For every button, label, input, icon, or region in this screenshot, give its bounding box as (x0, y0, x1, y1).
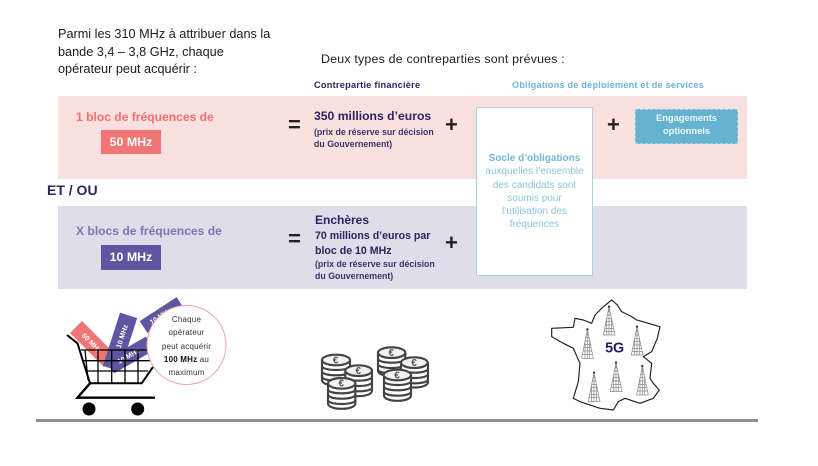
text: et / ou: ET / OU (47, 182, 98, 198)
tag: 10 MHz in cart (106, 337, 154, 373)
plus sign: second row: + (445, 230, 458, 255)
panel: base obligations: l’utilisation des (502, 206, 567, 217)
tag: 10 MHz (101, 245, 161, 270)
icon: euro coin stacks (322, 347, 428, 409)
tower tips (586, 305, 643, 374)
panel: base obligations: soumis pour (507, 193, 562, 204)
icon: map of France with 5G towers (552, 300, 660, 410)
box: optional commitments: optionnels (663, 126, 710, 136)
tag: 50 MHz: 50 MHz (110, 135, 152, 149)
text: auction: 70 millions d’euros par (315, 230, 430, 242)
map outline (552, 300, 660, 410)
tag: 10 MHz upright (103, 313, 137, 371)
intro text: Parmi les 310 MHz à attribuer dans la (58, 27, 270, 41)
text: auction: bloc de 10 MHz (315, 244, 392, 256)
equals sign: first row: = (288, 112, 301, 137)
tag: 10 MHz in cart: 10 MHz (117, 348, 141, 366)
callout circle (147, 306, 226, 384)
tag: 10 MHz far: 10 MHz (149, 307, 173, 326)
plus sign: first row: + (445, 112, 458, 137)
icon: euro coin stacks: € (411, 358, 417, 369)
tag: 50 MHz (101, 130, 161, 154)
panel: base obligations: fréquences (510, 219, 559, 230)
tag: 50 MHz (70, 321, 116, 367)
icon: euro coin stacks: € (356, 366, 362, 377)
text: auction: Enchères (315, 213, 369, 227)
intro text (58, 27, 270, 76)
text: 350 million euros: du Gouvernement) (314, 139, 392, 149)
text: 350 million euros: (prix de réserve sur décision (314, 127, 434, 137)
text: auction (315, 213, 435, 281)
icon: euro coin stacks: € (333, 355, 339, 366)
tag: 10 MHz upright: 10 MHz (116, 324, 130, 349)
column heading: obligations: Obligations de déploiement et de services (512, 80, 704, 90)
cart frame (67, 335, 155, 398)
callout text (162, 315, 211, 377)
tag: 50 MHz: 50 MHz (80, 332, 102, 355)
icon: euro coin stacks: € (394, 370, 400, 381)
plus sign: obligations: + (607, 112, 620, 137)
text: 350 million euros (314, 109, 434, 149)
callout text: Chaque (172, 315, 201, 324)
icon: euro coin stacks: € (339, 379, 345, 390)
callout text: opérateur (168, 328, 205, 337)
bottom rule (36, 419, 758, 422)
panel: base obligations (476, 107, 593, 276)
panel: 10 MHz band (58, 206, 747, 289)
equals sign: second row: = (288, 226, 301, 251)
panel: base obligations: Socle d’obligations (489, 153, 580, 164)
box: optional commitments (635, 109, 738, 144)
icon: euro coin stacks: € (389, 348, 395, 359)
intro text: bande 3,4 – 3,8 GHz, chaque (58, 44, 224, 58)
5G label: 5G (605, 340, 624, 356)
panel: base obligations: auxquelles l’ensemble (485, 166, 584, 177)
towers (582, 307, 648, 402)
heading: two types of compensation: Deux types de contreparties sont prévues : (321, 52, 565, 66)
column heading: financial: Contrepartie financière (314, 80, 420, 90)
label: one 50 MHz block: 1 bloc de fréquences de (76, 110, 214, 124)
tag: 10 MHz: 10 MHz (110, 250, 152, 264)
panel: 50 MHz band (58, 96, 747, 179)
callout text: maximum (168, 368, 205, 377)
box: optional commitments: Engagements (656, 113, 717, 123)
label: X 10 MHz blocks: X blocs de fréquences de (76, 224, 222, 238)
text: auction: du Gouvernement) (315, 271, 393, 281)
panel: base obligations: des candidats sont (493, 180, 576, 191)
intro text: opérateur peut acquérir : (58, 62, 197, 76)
text: auction: (prix de réserve sur décision (315, 259, 435, 269)
callout text: peut acquérir (162, 342, 211, 351)
tag: 10 MHz far (140, 297, 184, 333)
text: 350 million euros: 350 millions d’euros (314, 109, 431, 123)
cart wheels (82, 402, 144, 416)
callout text: 100 MHz au (164, 355, 209, 364)
